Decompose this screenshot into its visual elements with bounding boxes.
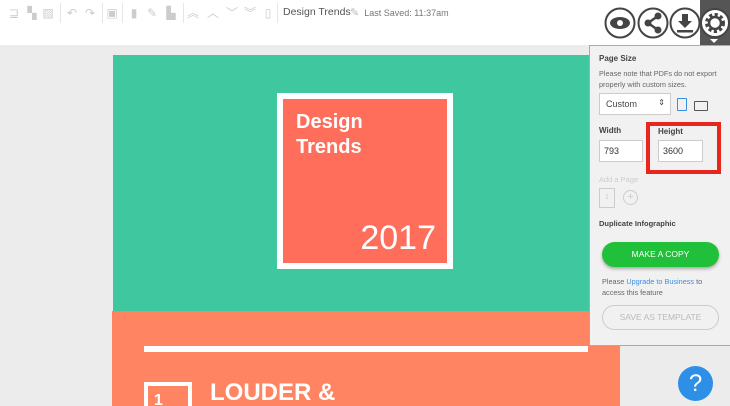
duplicate heading: Duplicate Infographic <box>599 219 676 228</box>
icon: share <box>638 8 668 38</box>
toolbar icons: ▚ <box>27 6 37 20</box>
action icons <box>604 0 730 45</box>
add page: Add a Page <box>599 175 638 184</box>
title text <box>296 111 363 158</box>
canvas: orange section <box>112 311 620 406</box>
document title: Design Trends <box>283 6 351 18</box>
toolbar icons: ▣ <box>106 6 118 20</box>
toolbar icons: ︾ <box>244 6 256 20</box>
width input <box>599 140 643 162</box>
title box <box>277 93 453 269</box>
toolbar icons: ▮ <box>131 6 137 20</box>
height highlight: 3600 <box>663 146 683 156</box>
panel: settings <box>589 45 730 346</box>
width input: 793 <box>604 146 619 156</box>
icon: page portrait <box>677 98 687 111</box>
title text: Trends <box>296 136 362 158</box>
page size heading: Page Size <box>599 54 636 63</box>
title text: Design <box>296 111 363 133</box>
toolbar icons: ↷ <box>85 6 95 20</box>
save as template button <box>602 305 719 330</box>
note: Please note that PDFs do not export properly with custom sizes. <box>599 69 717 89</box>
icon: gear <box>700 8 730 38</box>
icon: download <box>670 8 700 38</box>
icon: page landscape <box>694 101 708 111</box>
save as template button: SAVE AS TEMPLATE <box>620 312 701 322</box>
select: Custom <box>606 99 637 109</box>
width label: Width <box>599 126 621 135</box>
select <box>599 93 671 115</box>
toolbar icons: ﹀ <box>226 6 238 20</box>
select: ⇕ <box>658 98 665 107</box>
height highlight <box>646 122 721 174</box>
toolbar icons: ⊒ <box>9 6 19 20</box>
help button <box>678 366 713 401</box>
toolbar icons: ▙ <box>166 6 176 20</box>
upgrade note: Please Upgrade to Business to access this feature <box>602 277 702 297</box>
last saved: ✎ Last Saved: 11:37am <box>350 7 449 19</box>
panel: settings: + <box>627 191 634 203</box>
panel: settings: 1 <box>605 194 609 201</box>
icon: eye <box>604 8 636 38</box>
help button: ? <box>689 370 702 397</box>
canvas: teal header <box>113 55 620 312</box>
make a copy button: MAKE A COPY <box>632 249 689 259</box>
toolbar icons: ▯ <box>265 6 271 20</box>
toolbar icons: ✎ <box>147 6 157 20</box>
toolbar icons: ↶ <box>67 6 77 20</box>
toolbar icons: ︽ <box>187 6 199 20</box>
toolbar icons: ︿ <box>207 6 219 20</box>
toolbar icons <box>9 3 278 23</box>
toolbar <box>0 0 730 45</box>
toolbar icons: ▨ <box>42 6 54 20</box>
height highlight: Height <box>658 127 683 136</box>
year: 2017 <box>360 219 436 257</box>
number box <box>144 382 192 406</box>
make a copy button <box>602 242 719 267</box>
heading: LOUDER & <box>210 379 335 406</box>
